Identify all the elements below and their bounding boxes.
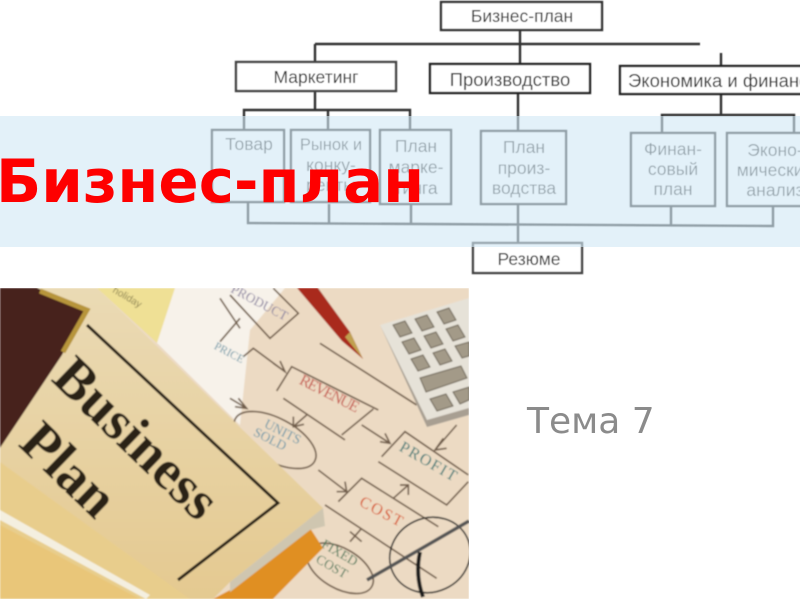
box: Рынок и конкуренты [291, 130, 370, 202]
box: Резюме: Резюме [498, 249, 560, 269]
paper background [0, 288, 469, 599]
box: План производства [481, 131, 566, 204]
white page sliver [0, 510, 150, 599]
flowchart labels: SOLD [251, 424, 289, 454]
yellow sticky note [97, 285, 175, 343]
box: План производства: водства [492, 178, 556, 198]
box: Маркетинг: Маркетинг [273, 67, 359, 87]
translucent blue band [0, 116, 800, 247]
folder cover [0, 288, 323, 599]
box: План маркетинга: марке- [389, 157, 444, 177]
inner page [0, 525, 140, 599]
flowchart labels: COST [313, 551, 351, 581]
box: Рынок и конкуренты: Рынок и [300, 136, 362, 154]
printed text: Business: Business [41, 345, 232, 532]
box: Товар [212, 130, 284, 202]
flowchart labels: FIXED [319, 536, 361, 569]
pencil [297, 288, 363, 359]
flowchart labels: COST [356, 493, 406, 531]
glasses [367, 504, 483, 600]
box: Маркетинг [236, 62, 396, 91]
box: Экономический анализ [727, 133, 800, 206]
flowchart labels: UNITS [262, 416, 304, 447]
flowchart labels [212, 281, 460, 581]
flowchart labels: REVENUE [297, 372, 362, 416]
printed text: Plan: Plan [8, 410, 129, 530]
folder tab [0, 462, 190, 599]
calculator [380, 298, 469, 427]
white sheet [157, 288, 285, 425]
subtitle: Тема 7: Тема 7 [527, 401, 655, 442]
box: Финансовый план: Финан- [644, 139, 702, 159]
box: Финансовый план: совый [648, 159, 698, 179]
box: Финансовый план: план [653, 179, 693, 199]
title: Бизнес-план [0, 148, 424, 217]
photo: business plan folder on flowchart [0, 288, 469, 599]
gold corner [40, 291, 87, 352]
box: Рынок и конкуренты: ренты [306, 175, 356, 195]
box: Товар: Товар [225, 134, 273, 154]
flowchart labels: PRICE [212, 340, 246, 366]
box: План производства: произ- [498, 158, 550, 178]
flowchart sketch [212, 281, 468, 600]
box: Финансовый план [631, 133, 715, 206]
black frame line [87, 325, 278, 580]
orange tab [213, 528, 323, 599]
connector lines [244, 30, 794, 243]
box: Производство: Производство [450, 69, 570, 90]
box: Рынок и конкуренты: конку- [306, 155, 356, 175]
leather wallet [0, 288, 85, 448]
diagram: business plan structure [210, 0, 800, 275]
box: План маркетинга: тинга [394, 178, 438, 198]
flowchart labels: PROFIT [396, 439, 460, 485]
page edges [230, 508, 325, 592]
box: Бизнес-план: Бизнес-план [471, 6, 573, 26]
box: Бизнес-план [441, 2, 602, 30]
box: План производства: План [503, 137, 545, 157]
box: Резюме [473, 243, 582, 273]
box: Производство [430, 64, 590, 93]
box: План маркетинга [380, 130, 451, 204]
flowchart lines [220, 288, 468, 600]
box: План маркетинга: План [395, 136, 437, 156]
